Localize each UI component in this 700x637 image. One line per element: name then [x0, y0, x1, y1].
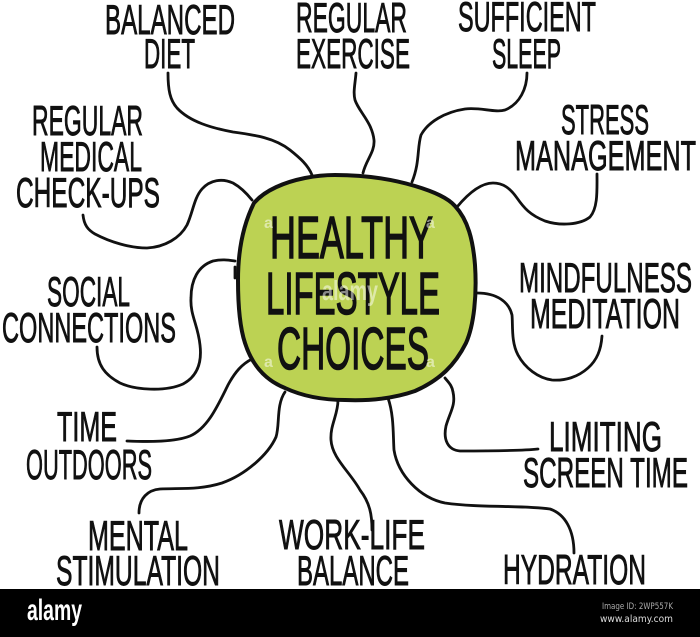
- label: work-life balance: [279, 511, 425, 594]
- watermarks: alamy: [322, 275, 378, 306]
- watermarks: [264, 215, 435, 371]
- footer logo: alamy: [27, 594, 82, 627]
- connector: time outdoors: [127, 359, 252, 441]
- connector: limiting screen time: [445, 378, 538, 451]
- footer band: [0, 589, 700, 637]
- label: stress management: [515, 96, 696, 179]
- label: social connections: SOCIAL: [47, 268, 130, 315]
- central green blob: [235, 175, 476, 400]
- label: regular exercise: [296, 0, 410, 77]
- label: sufficient sleep: [458, 0, 596, 77]
- label: balanced diet: [105, 0, 235, 77]
- label: time outdoors: [26, 403, 152, 488]
- connector: mindfulness meditation: [477, 293, 602, 380]
- central title: CHOICES: [277, 316, 429, 382]
- label: work-life balance: WORK-LIFE: [279, 511, 425, 558]
- label: regular medical check-ups: REGULAR: [32, 97, 143, 144]
- label: regular medical check-ups: CHECK-UPS: [16, 169, 160, 216]
- label: regular medical check-ups: MEDICAL: [40, 133, 142, 180]
- label: sufficient sleep: SLEEP: [492, 30, 561, 77]
- central title: [266, 205, 440, 382]
- label: mental stimulation: STIMULATION: [56, 547, 220, 594]
- watermarks: a: [264, 354, 273, 371]
- label: mindfulness meditation: [519, 254, 692, 337]
- central title: HEALTHY: [270, 205, 433, 271]
- label: mental stimulation: MENTAL: [88, 512, 188, 559]
- connector: mental stimulation: [139, 392, 285, 513]
- connector: regular exercise: [354, 73, 374, 173]
- connector: balanced diet: [168, 73, 312, 175]
- website: www.alamy.com: [600, 614, 673, 625]
- connector: regular medical check-ups: [83, 180, 252, 248]
- label: social connections: CONNECTIONS: [2, 304, 176, 351]
- watermarks: a: [264, 215, 273, 232]
- label: regular medical check-ups: [16, 97, 160, 216]
- watermarks: a: [426, 354, 435, 371]
- connector: work-life balance: [331, 400, 372, 530]
- watermarks: a: [426, 215, 435, 232]
- label: time outdoors: TIME: [57, 403, 117, 450]
- label: social connections: [2, 268, 176, 351]
- label: mental stimulation: [56, 512, 220, 594]
- label: regular exercise: EXERCISE: [296, 30, 410, 77]
- connector: social connections: [97, 260, 235, 389]
- central title: LIFESTYLE: [266, 261, 440, 327]
- label: balanced diet: DIET: [144, 30, 195, 77]
- connector: stress management: [457, 174, 597, 224]
- label: time outdoors: OUTDOORS: [26, 441, 152, 488]
- image id: Image ID: 2WP557K: [602, 602, 674, 612]
- label: limiting screen time: [523, 413, 688, 496]
- label: work-life balance: BALANCE: [297, 547, 409, 594]
- connector: hydration: [388, 398, 574, 553]
- connector: sufficient sleep: [412, 73, 527, 182]
